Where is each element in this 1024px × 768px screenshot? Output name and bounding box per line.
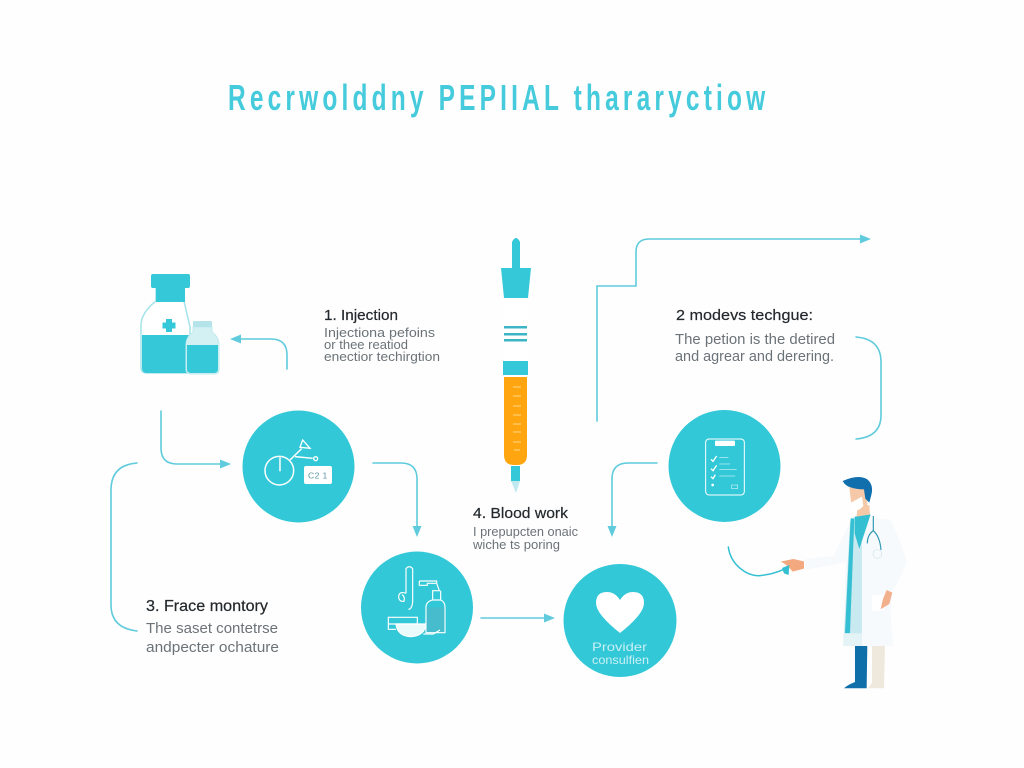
- hair: [843, 477, 872, 503]
- heading: step 4 blood work: 4. Blood work: [473, 505, 569, 522]
- text: step 2 description: and agrear and derering.: [675, 349, 834, 365]
- heading: step 3 monitoring: 3. Frace montory: [146, 598, 268, 615]
- arrow: injection to vials: [230, 334, 287, 369]
- text: provider consultation label: consulfien: [592, 653, 649, 667]
- probe cable: [728, 547, 784, 576]
- heading: step 2 technique: 2 modevs techgue:: [676, 307, 813, 324]
- text: step 4 description: wiche ts poring: [472, 538, 560, 552]
- panel: injection circle icon: [242, 410, 354, 522]
- text: step 3 description: The saset contetrse: [146, 621, 278, 637]
- panel: provider consultation circle: [564, 564, 676, 677]
- text: step 1 description: [324, 326, 440, 364]
- pointing hand: [781, 559, 804, 572]
- text: step 1 description: enectior techirgtion: [324, 350, 440, 364]
- arrow: supplies to provider circle: [481, 614, 555, 622]
- icon: doctor with probe: [728, 477, 907, 688]
- stethoscope: [867, 516, 881, 550]
- arrow: long route to top right: [597, 234, 871, 421]
- text: step 3 description: [146, 621, 279, 656]
- text: step 2 description: [675, 332, 835, 365]
- panel: injection circle icon: C2 1: [308, 471, 327, 481]
- arrow: injection circle to blood work circle: [373, 463, 422, 537]
- text: step 2 description: The petion is the detired: [675, 332, 835, 348]
- icon: medicine vials: [141, 274, 219, 374]
- neck and head: [857, 505, 870, 517]
- arrow: vials to injection circle: [161, 411, 231, 468]
- text: step 1 description: Injectiona pefoins: [324, 326, 435, 340]
- icon: syringe: [501, 238, 531, 493]
- text: provider consultation label: Provider: [592, 640, 647, 654]
- text: step 4 description: I prepupcten onaic: [473, 525, 578, 539]
- text: step 3 description: andpecter ochature: [146, 640, 279, 656]
- heading: step 1 injection: 1. Injection: [324, 307, 398, 324]
- text: step 1 description: or thee reatiod: [324, 338, 408, 352]
- icon: heart: [596, 592, 644, 633]
- text: provider consultation label: [592, 640, 649, 667]
- arrow: clipboard to provider circle: [608, 463, 657, 537]
- coat: [805, 517, 907, 646]
- scrubs: [855, 514, 871, 549]
- title: Recrwolddny PEPIIAL thararyctiow: [228, 77, 765, 118]
- arrow: return loop on left: [111, 463, 137, 631]
- panel: supplies circle icon: [361, 552, 473, 664]
- lower hand with paper: [872, 595, 883, 611]
- text: step 4 description: [472, 525, 578, 552]
- panel: clipboard circle icon: [668, 410, 780, 522]
- legs: [844, 646, 867, 688]
- arrow: right bracket curve: [856, 337, 881, 439]
